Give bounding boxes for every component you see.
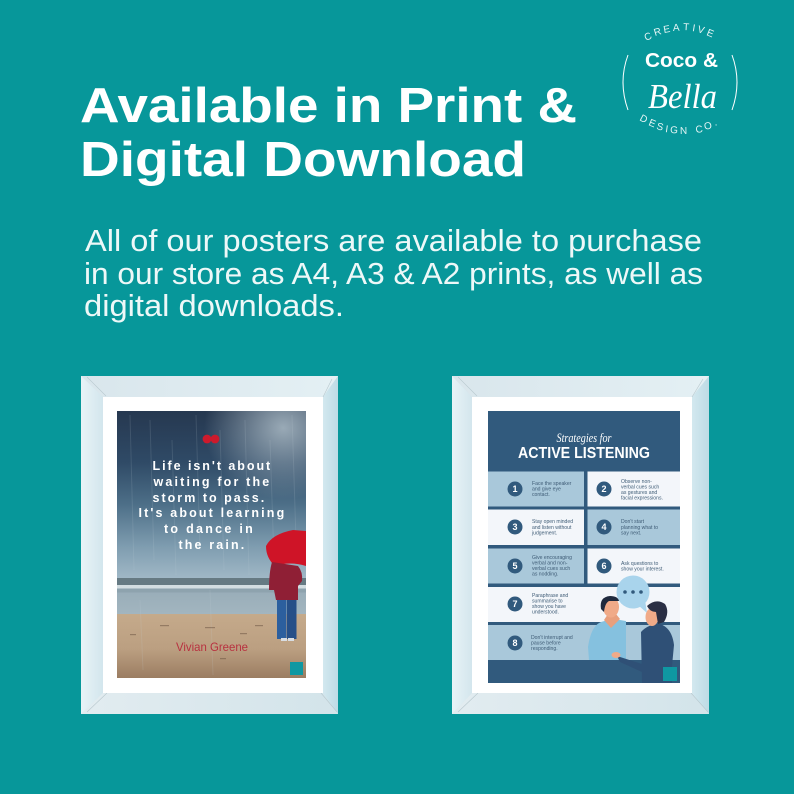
step text: Don't interrupt and — [531, 635, 573, 641]
logo: Coco & Bella Design Co.: C — [643, 31, 654, 44]
title — [80, 79, 577, 187]
step text: and listen without — [532, 525, 572, 531]
small logo badge — [663, 667, 677, 681]
quote text: Life isn't about — [152, 459, 272, 473]
logo: Coco & Bella Design Co.: I — [692, 23, 696, 34]
step text: Face the speaker — [532, 481, 572, 487]
logo: Coco & Bella Design Co.: G — [670, 125, 678, 136]
poster: active listening: 5 — [512, 561, 518, 571]
quote text: storm to pass. — [152, 491, 266, 505]
right person — [612, 601, 674, 683]
umbrella and figure — [266, 530, 306, 641]
quote text: waiting for the — [152, 475, 270, 489]
step text: summarise to — [532, 598, 563, 604]
step text: Paraphrase and — [532, 593, 568, 599]
step numbers — [508, 482, 612, 650]
step text: facial expressions. — [621, 496, 663, 502]
poster heading: ACTIVE LISTENING — [518, 445, 650, 462]
title: Digital Download — [80, 133, 526, 187]
step text: Ask questions to — [621, 561, 659, 567]
frame — [81, 376, 338, 714]
title: Available in Print & — [80, 79, 577, 133]
poster: active listening: 1 — [512, 484, 518, 494]
left person — [588, 596, 626, 660]
quote mark — [203, 435, 219, 443]
step text: Stay open minded — [532, 519, 573, 525]
step cards — [488, 472, 680, 660]
logo: Coco & Bella Design Co.: C — [695, 124, 704, 136]
step text: verbal cues such — [532, 566, 570, 572]
step text: show your interest. — [621, 566, 664, 572]
poster: active listening: 2 — [601, 484, 607, 494]
logo: Coco & Bella Design Co.: N — [680, 126, 687, 137]
logo: Coco & Bella Design Co.: V — [696, 24, 706, 37]
logo: Coco & Bella Design Co.: I — [665, 124, 669, 135]
poster: active listening: 4 — [601, 522, 607, 532]
step text: and give eye — [532, 486, 561, 492]
step text: say next. — [621, 530, 641, 536]
step text: show you have — [532, 604, 566, 610]
logo: Coco & Bella Design Co.: A — [673, 23, 680, 34]
logo: Coco & Bella Design Co.: D — [638, 113, 649, 126]
step text: verbal and non- — [532, 560, 568, 566]
poster heading — [518, 430, 650, 462]
poster heading: Strategies for — [556, 430, 612, 445]
logo: Coco & Bella Design Co.: E — [647, 118, 657, 130]
poster: active listening: 3 — [512, 522, 518, 532]
step text: pause before — [531, 640, 561, 646]
frame — [452, 376, 709, 714]
quote text: to dance in — [164, 522, 254, 536]
step text: as nodding. — [532, 572, 558, 578]
description text — [84, 223, 703, 323]
step text: Give encouraging — [532, 555, 572, 561]
step text: contact. — [532, 492, 550, 498]
logo: Coco & Bella Design Co.: T — [683, 22, 690, 33]
quote text: It's about learning — [138, 506, 286, 520]
step text: as gestures and — [621, 490, 657, 496]
step text — [531, 479, 664, 652]
poster: active listening — [488, 411, 680, 683]
author: Vivian Greene — [176, 640, 248, 654]
panel: left framed poster — [81, 376, 338, 714]
logo: Coco & Bella Design Co.: Coco & — [645, 50, 718, 72]
step text: Observe non- — [621, 479, 652, 485]
poster photo: rainy beach — [117, 411, 306, 678]
quote text — [138, 459, 286, 552]
logo: Coco & Bella Design Co.: R — [653, 26, 663, 39]
logo: Coco & Bella Design Co.: E — [663, 24, 671, 36]
logo: Coco & Bella Design Co.: S — [655, 121, 665, 134]
step text: planning what to — [621, 525, 658, 531]
step text: responding. — [531, 646, 558, 652]
logo: Coco & Bella Design Co.: . — [712, 118, 719, 129]
description text: digital downloads. — [84, 288, 344, 323]
description text: in our store as A4, A3 & A2 prints, as well as — [84, 256, 703, 291]
step text: verbal cues such — [621, 484, 659, 490]
illustration: two people talking — [588, 576, 674, 683]
logo: Coco & Bella Design Co. — [623, 22, 737, 137]
quote text: the rain. — [178, 538, 246, 552]
small logo badge — [290, 662, 303, 675]
description text: All of our posters are available to purchase — [85, 223, 702, 258]
logo: Coco & Bella Design Co.: Bella — [648, 77, 717, 116]
panel: right framed poster — [452, 376, 709, 714]
step text: judgement. — [531, 530, 557, 536]
step text: Don't start — [621, 519, 645, 525]
step text: understood. — [532, 610, 559, 616]
poster: active listening: 6 — [601, 561, 607, 571]
logo: Coco & Bella Design Co.: E — [705, 28, 715, 40]
speech bubble — [616, 576, 650, 613]
poster: active listening: 7 — [512, 599, 518, 609]
poster: active listening: 8 — [512, 638, 518, 648]
logo: Coco & Bella Design Co.: O — [703, 120, 714, 133]
